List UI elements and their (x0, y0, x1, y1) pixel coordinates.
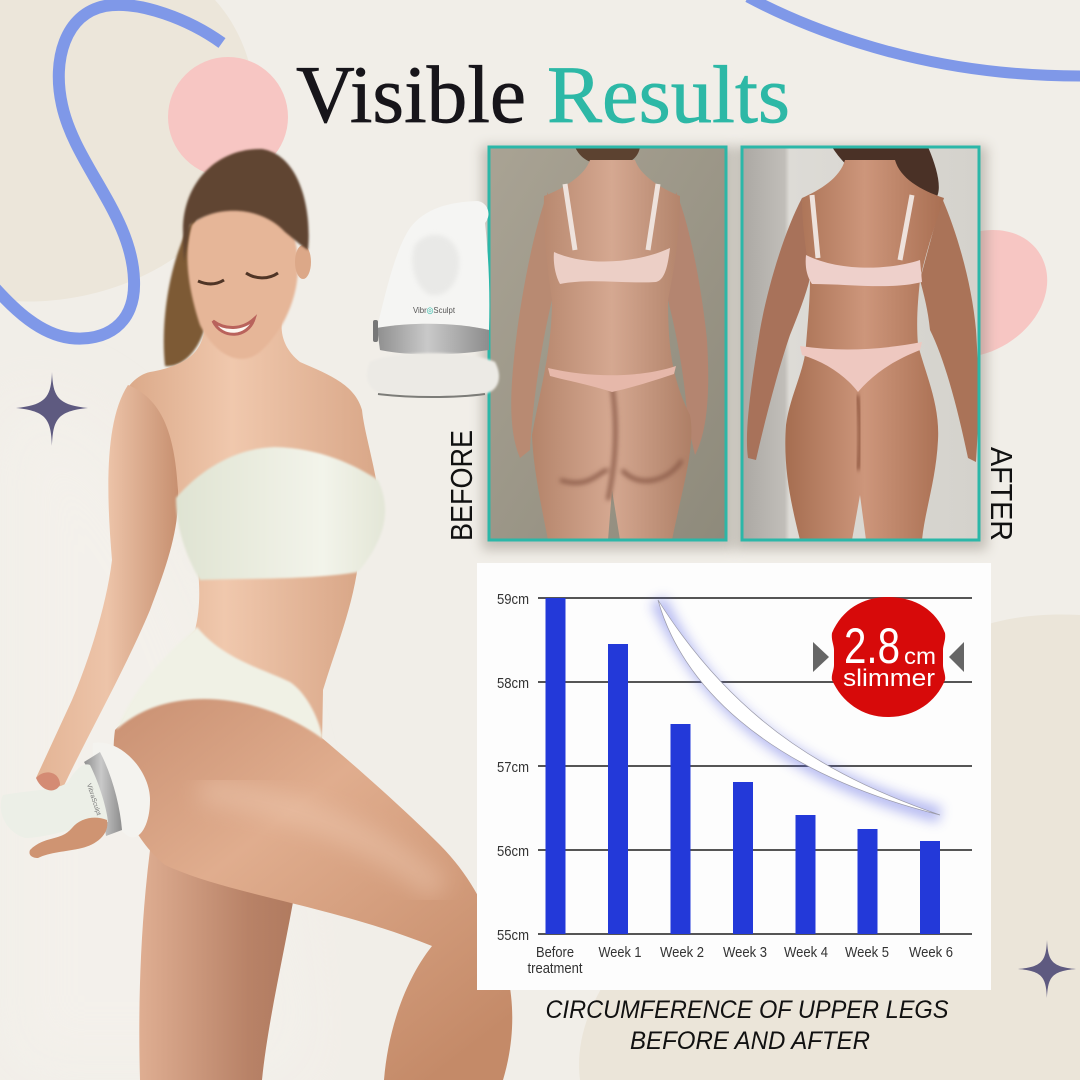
before left arm (511, 192, 552, 458)
x axis labels: Before (536, 945, 574, 961)
front leg (114, 697, 512, 1080)
neck and shoulders (112, 320, 378, 510)
illustration: woman using device (1, 149, 512, 1080)
hand device: puff, silver ring and handle: VibraSculpt (85, 783, 102, 817)
glute shading (857, 395, 860, 470)
y axis labels: 58cm (497, 676, 529, 692)
after right arm (920, 198, 978, 462)
icon: sparkle star, bottom right (1018, 940, 1076, 998)
label: before: BEFORE (444, 430, 479, 541)
title: Visible (296, 49, 526, 140)
chart grid lines (538, 598, 972, 934)
x axis labels: Week 2 (660, 945, 704, 961)
rear leg (139, 850, 296, 1080)
chart caption: CIRCUMFERENCE OF UPPER LEGS (546, 996, 949, 1024)
fingers (29, 818, 107, 858)
title: Results (547, 49, 790, 140)
x axis labels (528, 945, 953, 977)
decorative blue curve, left (0, 5, 222, 339)
y axis labels: 59cm (497, 592, 529, 608)
y axis labels: 56cm (497, 844, 529, 860)
callout: 2.8cm slimmer: slimmer (843, 665, 935, 692)
callout: 2.8cm slimmer: 2.8 (844, 618, 900, 674)
arm (36, 385, 178, 790)
decorative pink circle, top left (168, 57, 288, 177)
buttock shading (560, 385, 682, 500)
before torso and legs (532, 160, 691, 540)
smile (213, 319, 254, 334)
hair (183, 149, 309, 262)
before hair (576, 148, 640, 162)
panel: after photo (735, 146, 987, 550)
hand device: puff, silver ring and handle (1, 742, 150, 838)
callout: 2.8cm slimmer: cm (904, 643, 936, 669)
y axis labels: 57cm (497, 760, 529, 776)
after torso and legs (785, 160, 944, 540)
decorative blue curve, top right (748, 0, 1080, 76)
x axis labels: Week 4 (784, 945, 828, 961)
fluffy pad (367, 353, 499, 396)
device shell (377, 201, 489, 330)
y axis labels: 55cm (497, 928, 529, 944)
after bra (806, 255, 922, 286)
ponytail (164, 215, 208, 366)
logo: Vibr◎Sculpt (413, 305, 456, 315)
before underwear (548, 366, 676, 392)
after left arm (747, 198, 810, 460)
chart caption (546, 996, 949, 1055)
title (296, 49, 790, 140)
before right arm (668, 192, 708, 455)
decorative pink blob, right (975, 230, 1047, 356)
label: after: AFTER (984, 447, 1019, 541)
y axis labels (497, 592, 529, 944)
after hair (832, 147, 939, 198)
chart caption: BEFORE AND AFTER (630, 1027, 870, 1055)
panel: before photo (482, 146, 734, 550)
x axis labels: Week 3 (723, 945, 767, 961)
ear (295, 245, 311, 279)
torso (115, 565, 358, 745)
callout: 2.8cm slimmer (813, 597, 964, 717)
before bra (554, 248, 670, 284)
product photo: massager device (367, 201, 499, 397)
x axis labels: Week 6 (909, 945, 953, 961)
after underwear (800, 342, 922, 392)
x axis labels: Week 1 (598, 945, 642, 961)
x axis labels: treatment (528, 961, 582, 977)
x axis labels: Week 5 (845, 945, 889, 961)
eyes and brows (198, 273, 278, 284)
icon: sparkle star, left (16, 372, 88, 446)
silver band (377, 324, 489, 354)
trend curve (658, 600, 940, 815)
face (187, 208, 298, 359)
white briefs (116, 627, 323, 739)
bandeau top (176, 447, 385, 580)
bar chart panel (477, 563, 991, 990)
bars (546, 598, 940, 934)
